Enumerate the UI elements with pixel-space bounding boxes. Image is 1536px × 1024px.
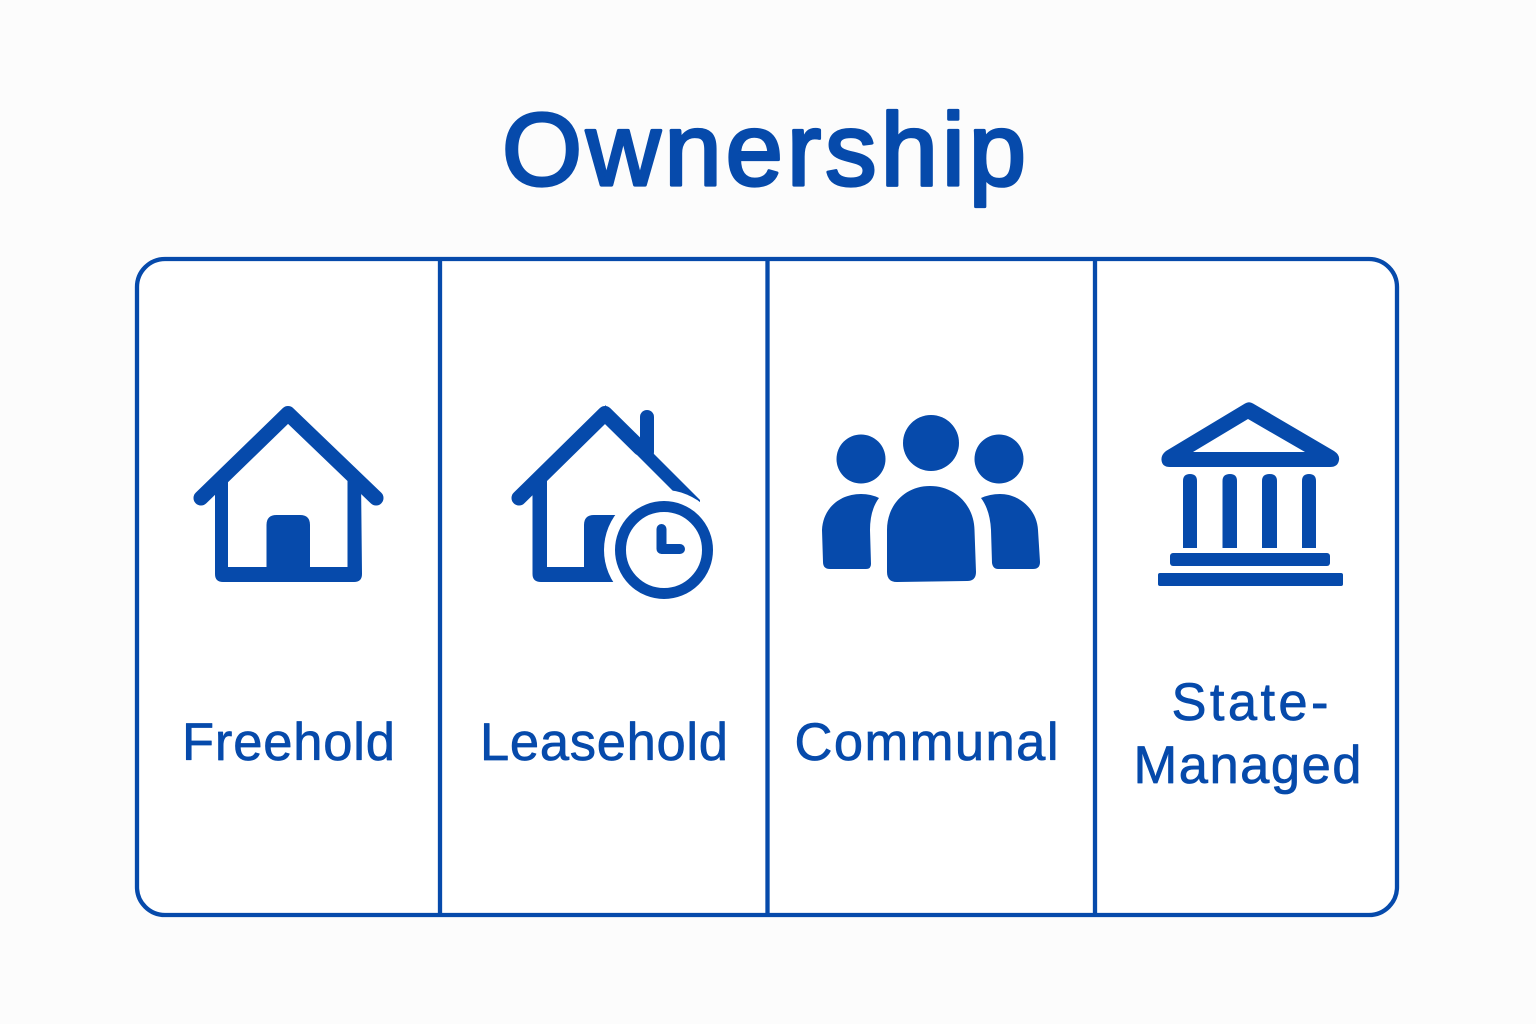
label: leasehold: Leasehold: [480, 713, 728, 772]
title: Ownership: [502, 92, 1026, 207]
icon: people: [822, 415, 1040, 582]
label: state-managed: State-: [1172, 673, 1328, 732]
label: state-managed: Managed: [1134, 736, 1362, 795]
panel: ownership table: [137, 259, 1397, 915]
icon: government building: [1158, 402, 1343, 586]
label: communal: Communal: [794, 713, 1058, 772]
icon: house with clock: [519, 405, 724, 610]
label: freehold: Freehold: [182, 713, 395, 772]
label: state-managed: [1134, 673, 1362, 795]
icon: house: [201, 414, 376, 582]
